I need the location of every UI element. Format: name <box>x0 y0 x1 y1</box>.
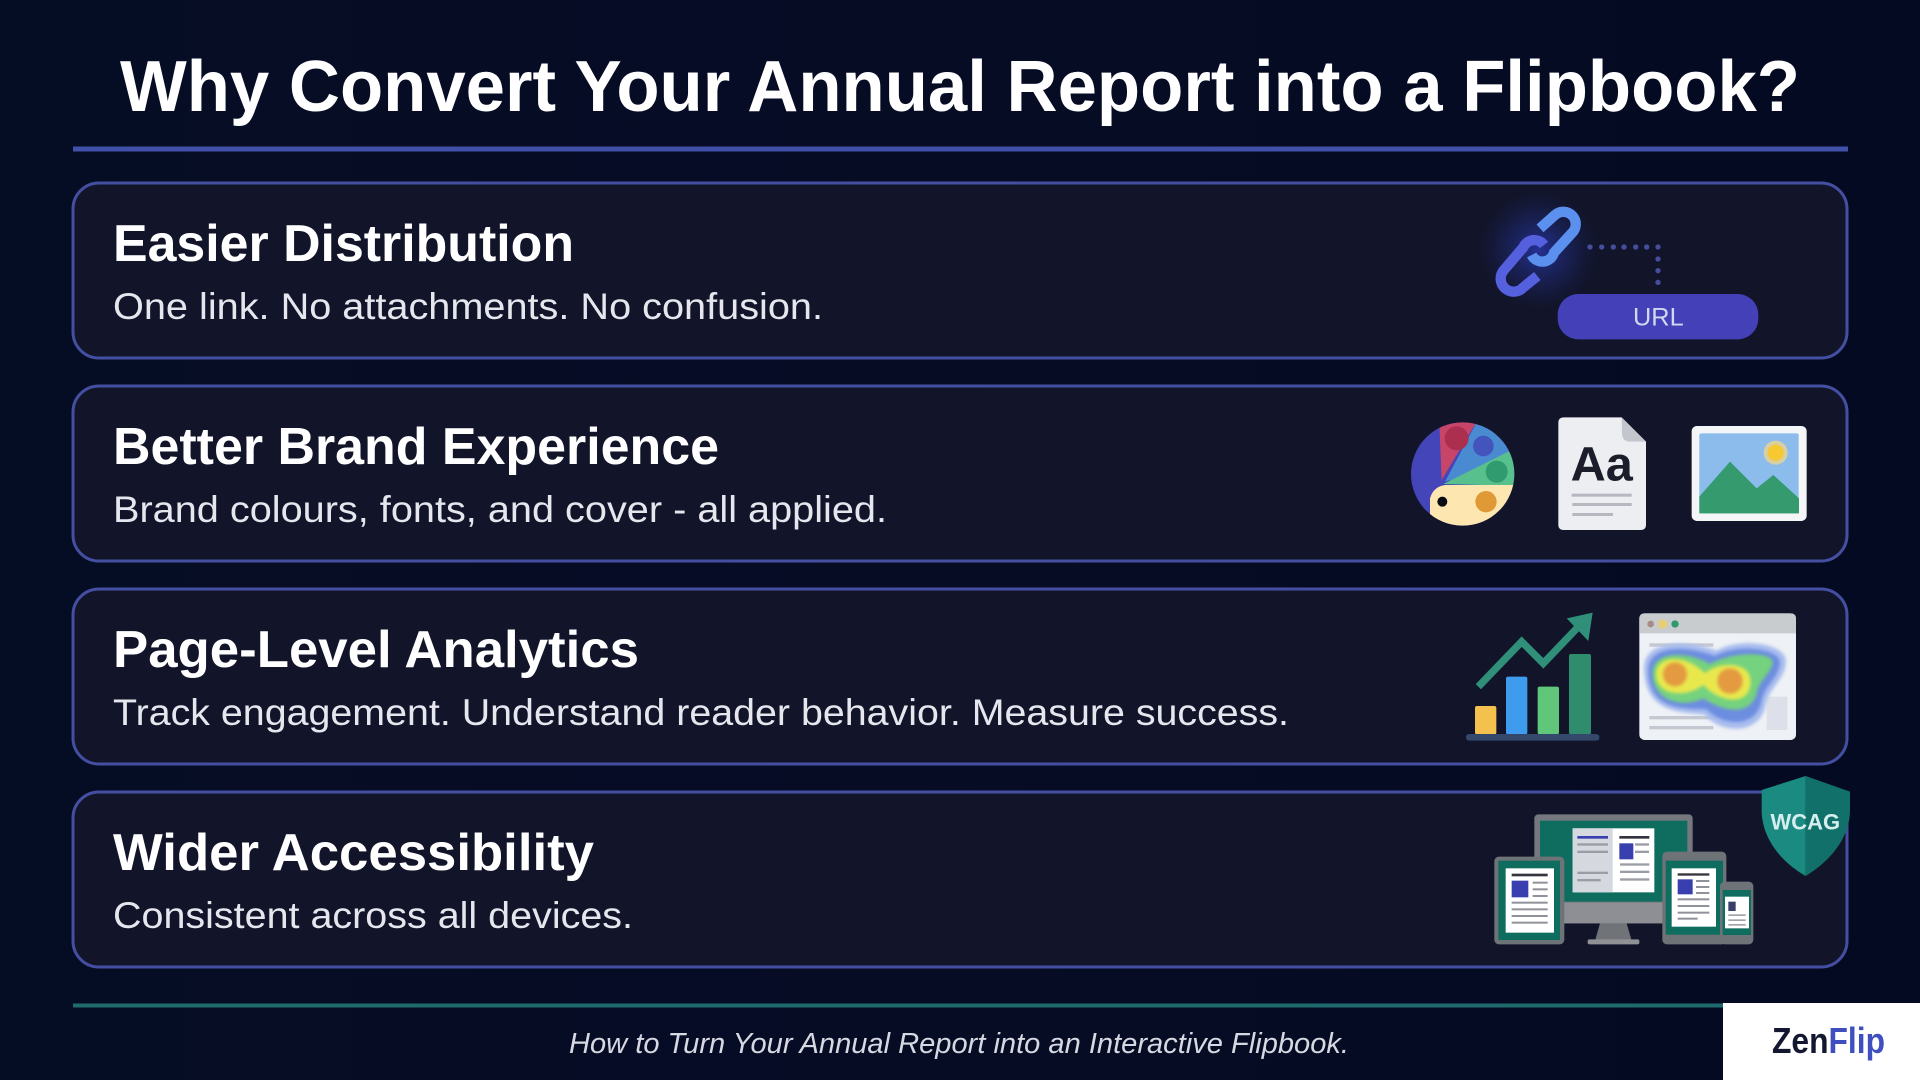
icon: growth bar chart <box>1466 613 1599 741</box>
description: Brand colours, fonts, and cover - all applied. <box>113 489 887 530</box>
card box <box>73 792 1847 967</box>
card box <box>73 183 1847 358</box>
icon: chain link with URL pill: URL <box>1633 304 1684 332</box>
icon: multi-device display <box>1494 814 1753 944</box>
icon: font document: Aa <box>1571 438 1634 492</box>
icon: chain link with URL pill <box>1480 192 1758 339</box>
panel: wider accessibility <box>73 776 1850 967</box>
panel: better brand experience <box>73 386 1847 561</box>
card box <box>73 386 1847 561</box>
icon: font document <box>1558 417 1646 530</box>
heading: Page-Level Analytics <box>113 621 639 679</box>
description: One link. No attachments. No confusion. <box>113 286 823 327</box>
logo: ZenFlip: ZenFlip <box>1772 1020 1885 1061</box>
icon: image picture <box>1692 426 1807 521</box>
logo: ZenFlip <box>1723 1003 1920 1080</box>
panel: easier distribution <box>73 183 1847 358</box>
description: Consistent across all devices. <box>113 895 633 936</box>
card box <box>73 589 1847 764</box>
title: Why Convert Your Annual Report into a Flipbook? <box>120 47 1800 127</box>
footer caption: How to Turn Your Annual Report into an Interactive Flipbook. <box>569 1028 1349 1060</box>
icon: colour palette <box>1411 422 1514 526</box>
heading: Easier Distribution <box>113 215 574 273</box>
heading: Better Brand Experience <box>113 418 719 476</box>
icon: WCAG shield <box>1762 776 1850 876</box>
icon: heatmap browser window <box>1639 613 1796 740</box>
icon: WCAG shield: WCAG <box>1771 809 1840 834</box>
heading: Wider Accessibility <box>113 824 594 882</box>
description: Track engagement. Understand reader behavior. Measure success. <box>113 692 1289 733</box>
panel: page-level analytics <box>73 589 1847 764</box>
